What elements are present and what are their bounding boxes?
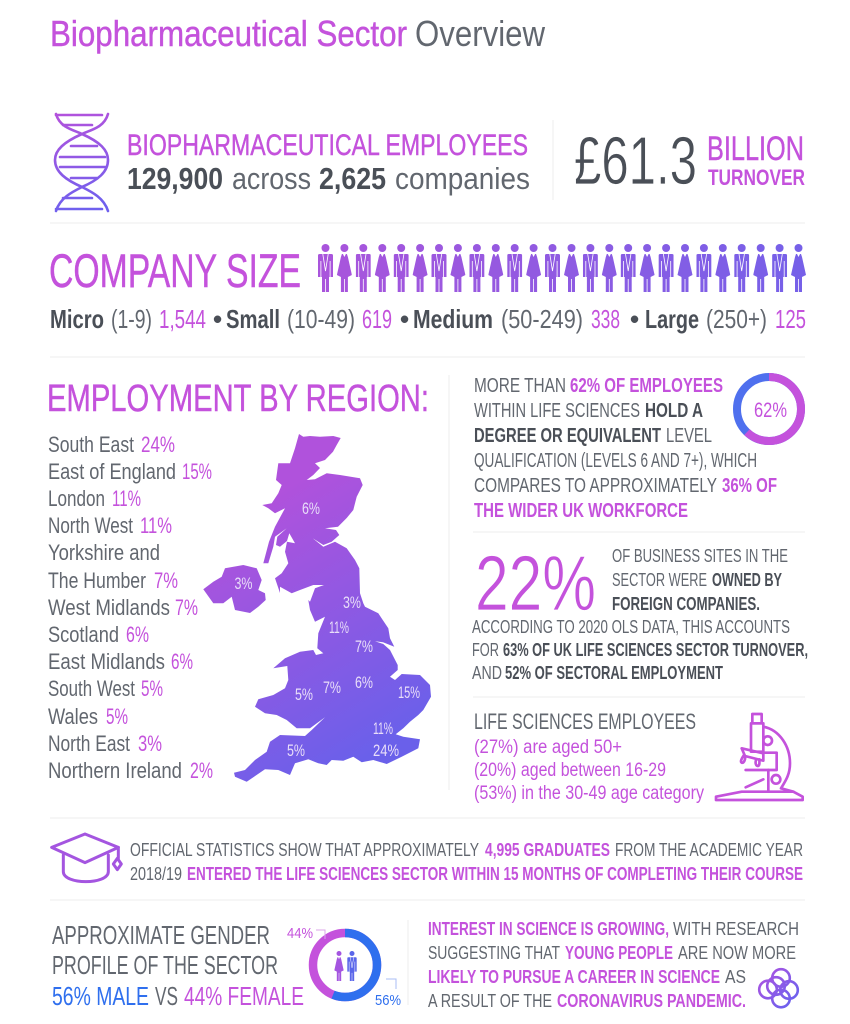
company size breakdown — [50, 304, 806, 334]
text block: interest in science: LIKELY TO PURSUE A CAREER IN SCIENCE — [428, 966, 720, 987]
text block: graduates: 2018/19 — [130, 864, 182, 884]
text block: qualification: THE WIDER UK WORKFORCE — [474, 500, 688, 522]
region list: Yorkshire and — [48, 540, 160, 565]
company size breakdown: Micro — [50, 304, 104, 334]
text block: interest in science: ARE NOW MORE — [678, 942, 796, 963]
text block: foreign ownership: AND — [472, 663, 502, 683]
text block: foreign ownership: 52% OF SECTORAL EMPLOYMENT — [505, 663, 723, 683]
text block: graduates: 4,995 GRADUATES — [485, 840, 610, 860]
text block: qualification: 62% OF EMPLOYEES — [570, 375, 723, 397]
text block: qualification: COMPARES TO APPROXIMATELY — [474, 475, 717, 497]
icon: microscope — [716, 714, 803, 800]
UK map — [203, 434, 431, 782]
icon: male figure — [347, 951, 357, 981]
text block: foreign ownership: FOR — [472, 640, 499, 660]
region list: Wales — [48, 704, 98, 729]
text block: interest in science: WITH RESEARCH — [673, 918, 799, 939]
text block: age of employees — [474, 709, 704, 804]
region list: London — [48, 486, 105, 511]
company size breakdown: Large — [645, 304, 699, 334]
region list: Scotland — [48, 622, 119, 647]
employees headline: BIOPHARMACEUTICAL EMPLOYEES — [127, 129, 528, 162]
turnover figure: BILLION — [707, 130, 804, 168]
region list: 7% — [175, 595, 198, 620]
donut: 62%: 62% — [754, 399, 787, 422]
company size breakdown: (1-9) — [111, 304, 152, 334]
donut: gender split — [287, 925, 401, 1009]
text block: qualification: 36% OF — [722, 475, 777, 497]
company size breakdown: Medium — [413, 304, 493, 334]
icon: graduation cap — [52, 834, 121, 882]
company size breakdown: (250+) — [706, 304, 767, 334]
text block: gender profile — [52, 920, 304, 1011]
UK map: 7% — [355, 637, 373, 656]
employees headline: companies — [395, 161, 530, 196]
company size breakdown: • — [630, 304, 639, 334]
text block: qualification: DEGREE OR EQUIVALENT — [474, 425, 661, 447]
text block: interest in science: A RESULT OF THE — [428, 990, 552, 1011]
donut: 62% — [737, 377, 801, 441]
turnover figure: TURNOVER — [708, 165, 805, 190]
employees headline: 129,900 — [127, 161, 223, 196]
icon row: people — [318, 244, 806, 292]
company size heading: COMPANY SIZE — [49, 244, 301, 297]
UK map: 3% — [343, 593, 361, 612]
UK map: 11% — [373, 719, 393, 738]
region list: 3% — [138, 731, 162, 756]
UK map: 6% — [302, 499, 320, 518]
region list: South West — [48, 676, 135, 701]
UK map: 11% — [329, 618, 349, 637]
text block: interest in science: SUGGESTING THAT — [428, 942, 560, 963]
icon: female figure — [334, 951, 344, 981]
region list: East of England — [48, 459, 176, 484]
icon: molecule flower — [759, 969, 798, 1007]
region list: 7% — [154, 568, 178, 593]
text block: foreign ownership: OF BUSINESS SITES IN THE — [612, 546, 788, 566]
region list: West Midlands — [48, 595, 170, 620]
text block: qualification: MORE THAN — [474, 375, 566, 397]
text block: graduates — [130, 840, 803, 884]
region list: 24% — [141, 432, 175, 457]
employees headline: across — [232, 161, 311, 196]
UK map: 15% — [398, 683, 420, 702]
region list: Northern Ireland — [48, 758, 182, 783]
text block: gender profile: 56% MALE — [52, 981, 149, 1011]
region list: North West — [48, 513, 133, 538]
text block: foreign ownership: SECTOR WERE — [612, 570, 707, 590]
text block: interest in science: YOUNG PEOPLE — [565, 942, 673, 963]
UK map: 6% — [355, 673, 373, 692]
region list: 15% — [182, 459, 212, 484]
region list — [48, 432, 213, 783]
employees headline: 2,625 — [319, 161, 386, 196]
title: Overview — [415, 13, 546, 54]
region list: The Humber — [48, 568, 146, 593]
UK map: 5% — [295, 685, 313, 704]
region list: 6% — [126, 622, 149, 647]
employment by region heading: EMPLOYMENT BY REGION: — [47, 378, 429, 420]
UK map: 3% — [234, 574, 252, 593]
icon: DNA helix — [55, 114, 108, 211]
text block: qualification — [474, 375, 777, 522]
company size breakdown: (50-249) — [501, 304, 583, 334]
text block: gender profile: PROFILE OF THE SECTOR — [52, 950, 278, 980]
UK map: 5% — [287, 741, 305, 760]
text block: foreign ownership: FOREIGN COMPANIES. — [612, 594, 760, 614]
employees headline — [127, 129, 530, 196]
region list: South East — [48, 432, 134, 457]
region list: 6% — [171, 649, 193, 674]
label: 44%: 44% — [287, 925, 313, 942]
text block: age of employees: (53%) in the 30-49 age category — [474, 783, 704, 804]
text block: qualification: WITHIN LIFE SCIENCES — [474, 400, 640, 422]
text block: interest in science: CORONAVIRUS PANDEMIC. — [557, 990, 746, 1011]
region list: 11% — [112, 486, 141, 511]
company size breakdown: 338 — [591, 304, 620, 334]
UK map: 7% — [323, 678, 341, 697]
text block: gender profile: 44% FEMALE — [184, 981, 304, 1011]
text block: age of employees: (27%) are aged 50+ — [474, 737, 622, 758]
UK map: 24% — [373, 741, 399, 760]
label: 56%: 56% — [375, 992, 401, 1009]
text block: age of employees: LIFE SCIENCES EMPLOYEES — [474, 709, 696, 734]
region list: East Midlands — [48, 649, 165, 674]
company size breakdown: • — [400, 304, 409, 334]
company size breakdown: 619 — [362, 304, 392, 334]
text block: interest in science: AS — [725, 966, 746, 987]
region list: North East — [48, 731, 130, 756]
text block: interest in science — [428, 918, 799, 1011]
text block: gender profile: APPROXIMATE GENDER — [52, 920, 270, 950]
region list: 5% — [106, 704, 128, 729]
text block: interest in science: INTEREST IN SCIENCE IS GROWING, — [428, 918, 669, 939]
text block: graduates: OFFICIAL STATISTICS SHOW THAT APPROXIMATELY — [130, 840, 479, 860]
text block: age of employees: (20%) aged between 16-29 — [474, 760, 666, 781]
region list: 2% — [190, 758, 213, 783]
company size breakdown: 1,544 — [159, 304, 206, 334]
region list: 11% — [140, 513, 172, 538]
region list: 5% — [141, 676, 163, 701]
text block: foreign ownership: OWNED BY — [712, 570, 782, 590]
company size breakdown: • — [213, 304, 222, 334]
company size breakdown: 125 — [775, 304, 806, 334]
title: Biopharmaceutical Sector — [50, 13, 407, 54]
company size breakdown: Small — [226, 304, 280, 334]
text block: qualification: HOLD A — [645, 400, 703, 422]
company size breakdown: (10-49) — [287, 304, 355, 334]
text block: qualification: LEVEL — [666, 425, 712, 447]
big stat: 22%: 22% — [475, 539, 596, 627]
text block: gender profile: VS — [155, 981, 178, 1011]
text block: foreign ownership — [472, 546, 808, 683]
turnover figure: £61.3 — [574, 123, 697, 199]
